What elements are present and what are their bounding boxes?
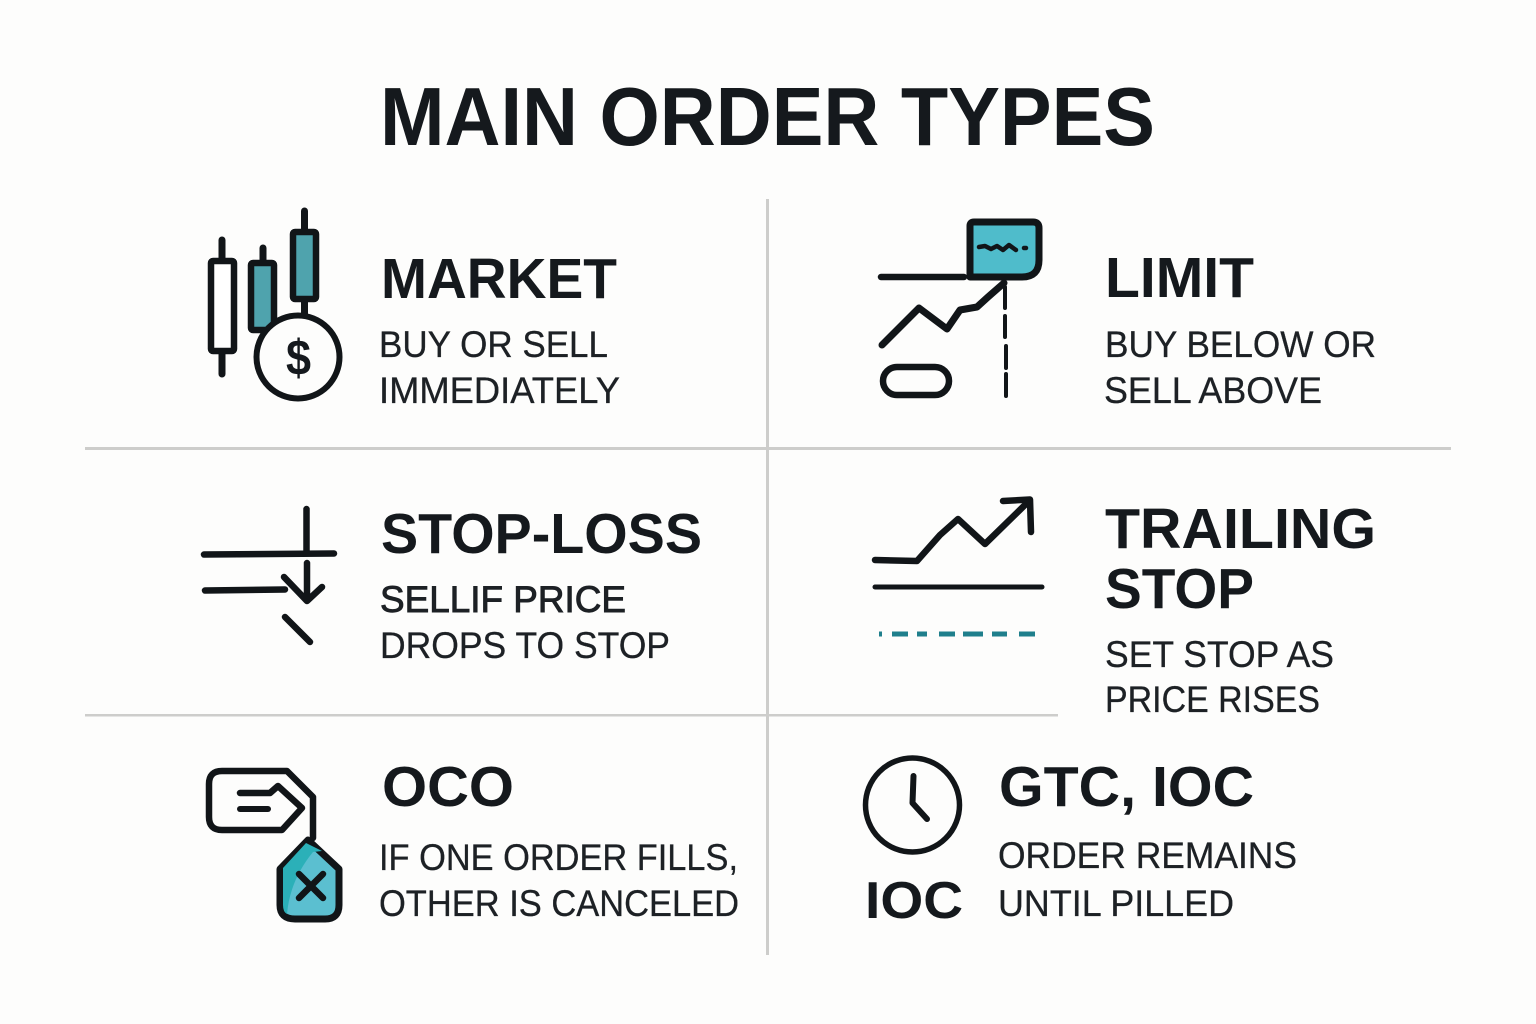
description: limit: [1104, 324, 1376, 411]
description: gtc, ioc: [998, 835, 1297, 924]
heading: gtc, ioc: GTC, IOC: [999, 755, 1254, 819]
panel: market: [211, 211, 620, 411]
description: oco: [379, 837, 739, 924]
panel: trailing stop: [875, 497, 1376, 720]
icon: clock: [866, 758, 960, 852]
panel: gtc, ioc: [865, 755, 1297, 930]
panel: stop-loss: [204, 502, 702, 666]
description: oco: IF ONE ORDER FILLS,: [379, 837, 738, 878]
description: trailing stop: PRICE RISES: [1105, 679, 1320, 720]
description: trailing stop: SET STOP AS: [1105, 634, 1334, 675]
title: MAIN ORDER TYPES: [380, 70, 1155, 163]
label: ioc: IOC: [865, 872, 963, 930]
heading: stop-loss: STOP-LOSS: [381, 502, 702, 566]
description: gtc, ioc: UNTIL PILLED: [998, 883, 1234, 924]
icon: stop-loss lines and down arrow: [204, 509, 334, 642]
description: stop-loss: [380, 579, 670, 666]
icon: candlesticks and dollar coin: $: [286, 330, 311, 386]
description: oco: OTHER IS CANCELED: [379, 883, 739, 924]
heading: oco: OCO: [382, 755, 514, 819]
description: market: IMMEDIATELY: [379, 370, 620, 411]
description: limit: BUY BELOW OR: [1105, 324, 1376, 365]
description: gtc, ioc: ORDER REMAINS: [998, 835, 1297, 876]
panel: limit: [881, 222, 1376, 411]
icon: linked tags with cancel mark: [209, 771, 339, 919]
panel: oco: [209, 755, 739, 924]
icon: limit price chart: [881, 222, 1039, 396]
description: limit: SELL ABOVE: [1104, 370, 1322, 411]
description: market: [379, 324, 620, 411]
description: stop-loss: DROPS TO STOP: [380, 625, 670, 666]
icon: rising trend with trailing stop line: [875, 500, 1042, 634]
heading: trailing stop: [1105, 497, 1376, 621]
icon: candlesticks and dollar coin: [211, 211, 340, 398]
description: market: BUY OR SELL: [379, 324, 608, 365]
heading: market: MARKET: [381, 247, 617, 311]
description: trailing stop: [1105, 634, 1334, 720]
heading: trailing stop: TRAILING: [1105, 497, 1376, 561]
heading: trailing stop: STOP: [1105, 557, 1254, 621]
heading: limit: LIMIT: [1105, 246, 1254, 310]
description: stop-loss: SELLIF PRICE: [380, 579, 626, 620]
